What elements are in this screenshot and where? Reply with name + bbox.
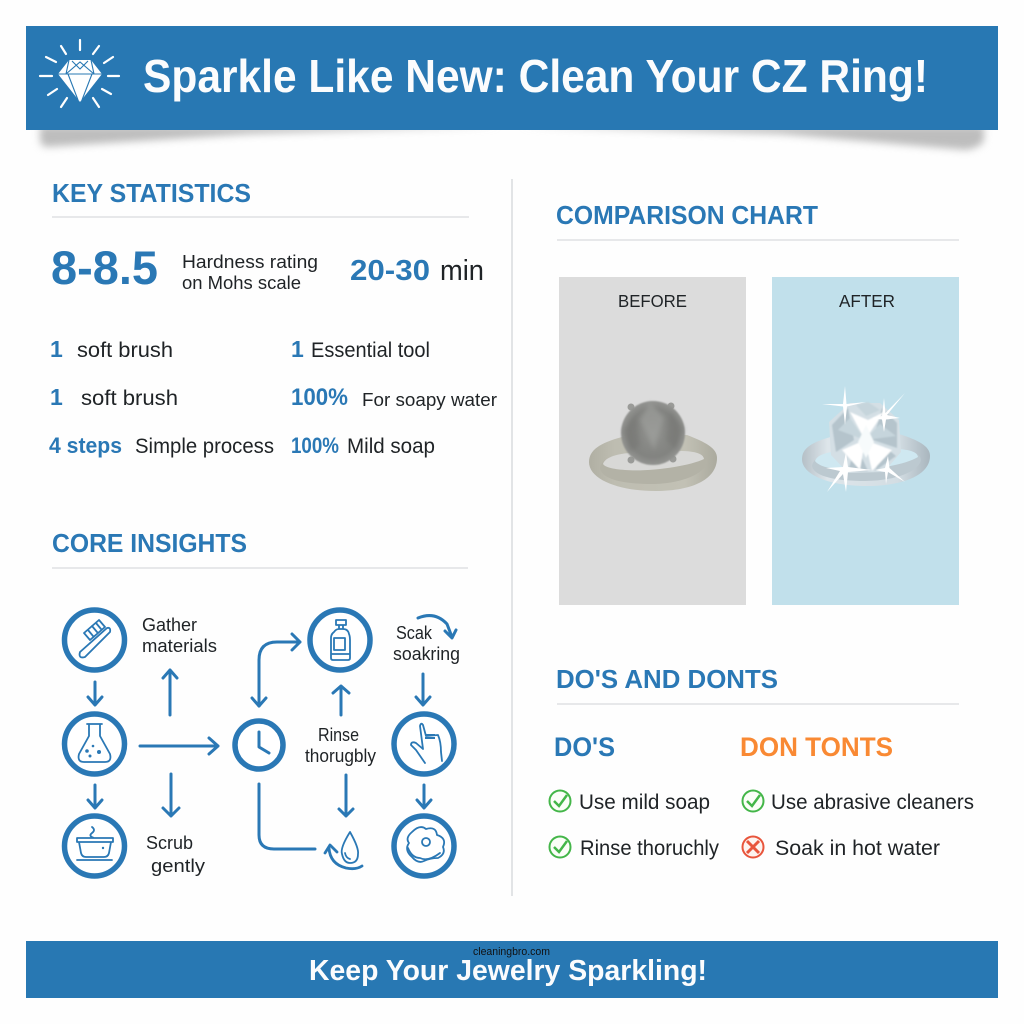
do item 2: Rinse thoruchly [580,837,719,860]
icon: check [550,790,570,812]
heading: comparison chart: COMPARISON CHART [556,200,818,230]
heading: do's and donts: DO'S AND DONTS [556,664,778,694]
stat: essential tool: Essential tool [311,339,430,362]
title: Sparkle Like New: Clean Your CZ Ring! [143,50,928,102]
stat: time: 20-30 [350,255,430,287]
stat: time: min [440,255,484,287]
step labels: gently [151,855,206,876]
heading: core insights: CORE INSIGHTS [52,528,247,558]
don't item 2: Soak in hot water [775,837,940,860]
step labels: Rinse [318,724,359,745]
stat: simple process: Simple process [135,435,274,458]
illustration: sparkling ring [802,386,930,492]
step labels: Scrub [146,832,193,853]
after card: AFTER [839,291,895,311]
stat: soft brush 2: 1 [50,384,63,410]
gem [829,402,901,473]
stat: hardness: on Mohs scale [182,272,301,293]
before card: BEFORE [618,291,687,311]
don't item 1: Use abrasive cleaners [771,791,974,814]
panel: core insights [52,528,468,876]
do item 1: Use mild soap [579,791,710,814]
stat: soft brush 2 [50,384,178,410]
step labels: Scak [396,622,433,643]
header banner [26,26,998,130]
icon: clock [235,721,283,769]
stat: hardness [51,241,318,294]
panel: comparison chart [556,200,959,605]
icon: check [550,836,570,858]
footer banner [26,941,998,998]
icon: hand [394,714,454,774]
stat: soapy water: For soapy water [362,389,497,410]
stat: mild soap [291,433,435,458]
stat: soft brush 1: 1 [50,336,63,362]
stat: soft brush 1 [50,336,173,362]
watermark: cleaningbro.com [473,946,550,958]
step labels [142,614,460,876]
stat: mild soap: 100% [291,433,339,458]
icon: sparkling diamond [40,40,119,107]
stat: simple process [49,433,274,458]
icon: bowl [64,816,124,876]
icon: brush [64,610,124,670]
don'ts column [740,732,974,860]
step labels: materials [142,635,217,656]
icon: check [742,790,764,812]
stat: essential tool: 1 [291,336,304,362]
icon: water drop [325,832,362,869]
panel: do's and don'ts [550,664,974,860]
stat: soft brush 2: soft brush [81,387,178,410]
stat: mild soap: Mild soap [347,435,435,458]
panel: key statistics [49,178,497,458]
stat: soapy water [291,384,497,411]
step labels: Gather [142,614,197,635]
footer text: Keep Your Jewelry Sparkling! [309,955,707,987]
sparkles [822,386,905,492]
do's column: DO'S [554,732,615,762]
stat: hardness: 8-8.5 [51,241,158,294]
after card [772,277,959,605]
step labels: soakring [393,643,460,664]
stat: simple process: 4 steps [49,433,122,458]
heading: key statistics: KEY STATISTICS [52,178,251,208]
icon: bottle [310,610,370,670]
do's column [550,732,719,860]
icon: clean ring in circle [394,816,454,876]
step labels: thorugbly [305,745,377,766]
icon: flask [64,714,124,774]
flow arrows [88,616,456,849]
stat: time [350,255,484,287]
stat: soft brush 1: soft brush [77,339,173,362]
don'ts column: DON TONTS [740,732,893,762]
stat: hardness: Hardness rating [182,251,318,272]
stat: soapy water: 100% [291,384,348,411]
column divider [511,179,513,896]
icon: cross [742,836,764,858]
before card [559,277,746,605]
header shadow [40,126,984,150]
illustration: dull ring [589,401,717,491]
